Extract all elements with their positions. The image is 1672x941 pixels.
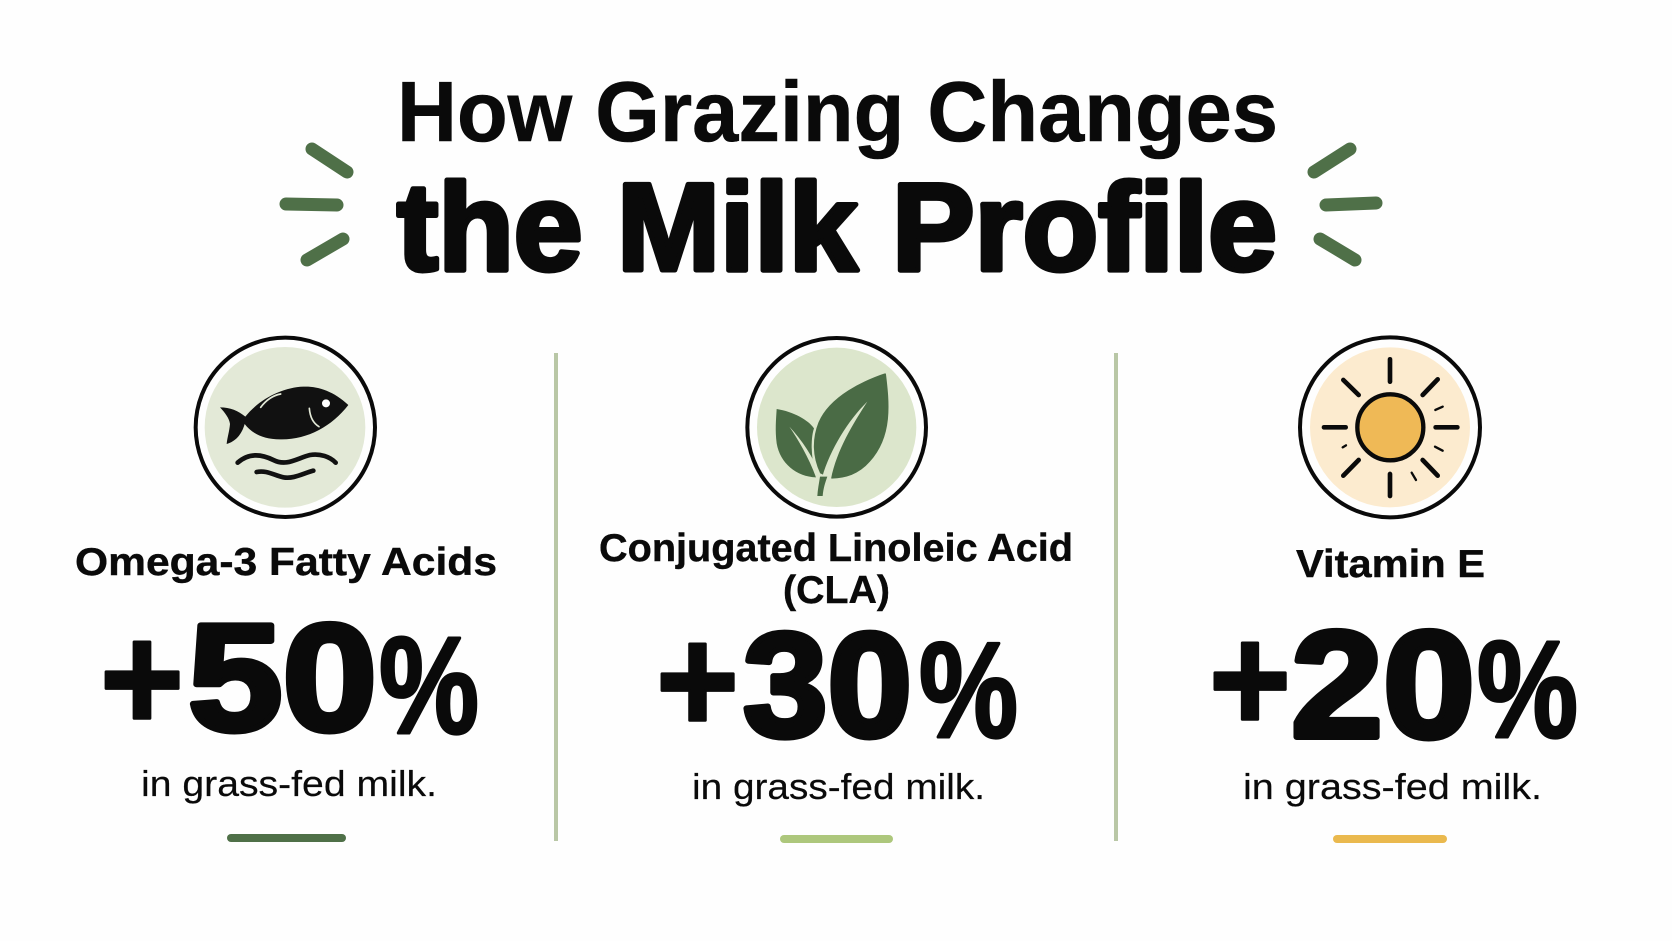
stat: +50%: + bbox=[100, 594, 184, 762]
accent bar bbox=[227, 834, 346, 842]
stat: +20%: + bbox=[1209, 595, 1291, 763]
stat: +50%: 50 bbox=[188, 593, 377, 763]
stat: +20%: 20 bbox=[1291, 600, 1475, 770]
text: in grass-fed milk: in grass-fed milk. bbox=[1243, 766, 1542, 807]
label: vitamin e: Vitamin E bbox=[1296, 543, 1485, 586]
stat: +30%: + bbox=[656, 596, 739, 764]
divider bbox=[1114, 353, 1118, 841]
panel: omega-3 bbox=[75, 338, 497, 842]
label: conjugated linoleic acid (cla): Conjugated Linoleic Acid bbox=[599, 527, 1073, 570]
text: in grass-fed milk: in grass-fed milk. bbox=[692, 766, 985, 807]
panel: conjugated linoleic acid bbox=[599, 338, 1073, 843]
label: conjugated linoleic acid (cla) bbox=[599, 527, 1073, 612]
title: the Milk Profile bbox=[397, 159, 1277, 297]
label: omega-3 fatty acids: Omega-3 Fatty Acids bbox=[75, 541, 497, 584]
icon: fish and waves bbox=[196, 338, 375, 517]
stat: +20%: % bbox=[1477, 613, 1578, 767]
divider bbox=[554, 353, 558, 841]
title bbox=[397, 65, 1278, 297]
stat: +30% bbox=[656, 596, 1018, 768]
accent bar bbox=[780, 835, 893, 843]
icon: right accent ticks bbox=[1314, 149, 1376, 260]
icon: sun bbox=[1300, 337, 1480, 517]
title: How Grazing Changes bbox=[397, 65, 1278, 160]
stat: +20% bbox=[1209, 595, 1578, 770]
stat: +30%: % bbox=[919, 614, 1018, 766]
stat: +50%: % bbox=[379, 609, 479, 763]
icon: leaves bbox=[747, 338, 926, 517]
text: in grass-fed milk: in grass-fed milk. bbox=[141, 763, 437, 804]
panel: vitamin e bbox=[1209, 337, 1578, 843]
stat: +50% bbox=[100, 593, 479, 763]
stat: +30%: 30 bbox=[743, 603, 912, 768]
icon: left accent ticks bbox=[286, 149, 347, 260]
label: conjugated linoleic acid (cla): (CLA) bbox=[783, 569, 890, 612]
accent bar bbox=[1333, 835, 1447, 843]
